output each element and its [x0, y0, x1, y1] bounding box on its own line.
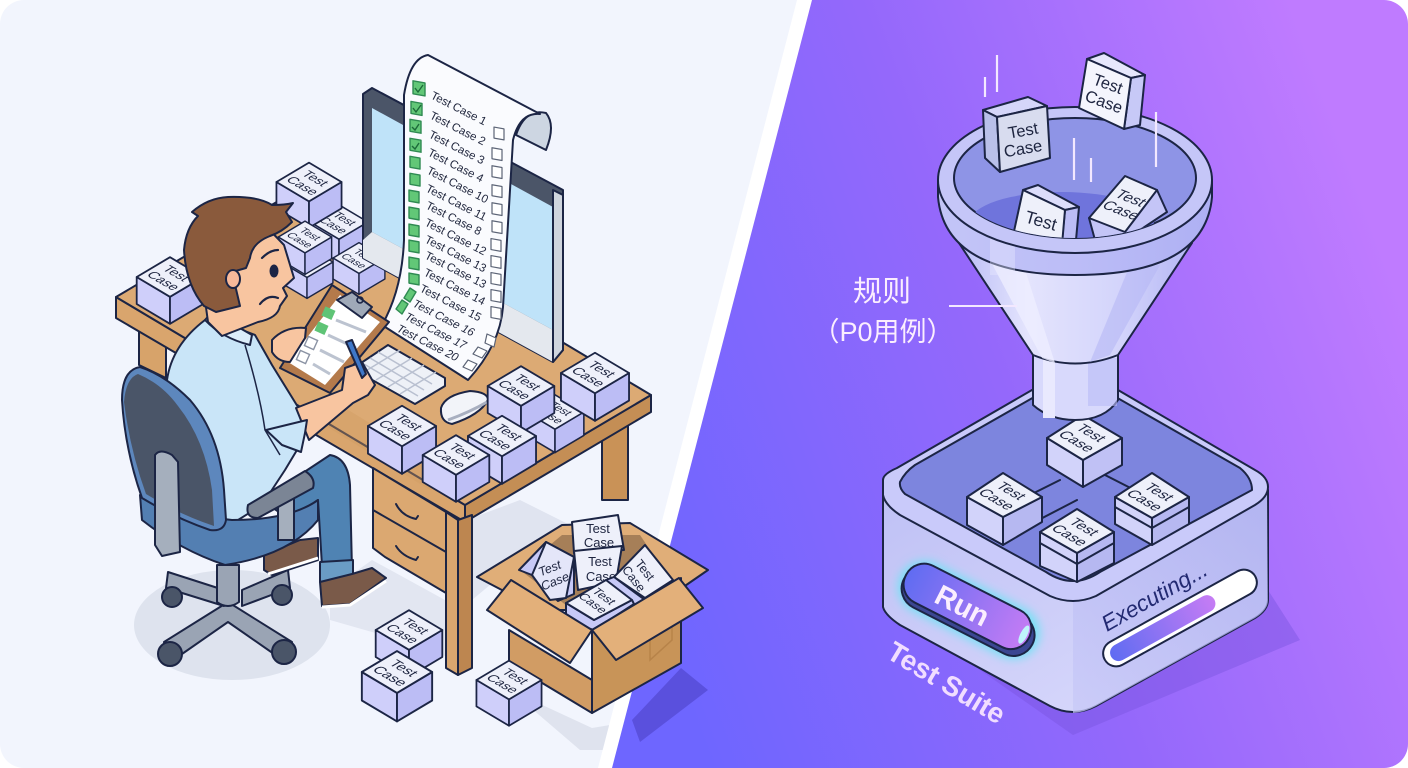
floor cubes: Case [382, 622, 423, 645]
floor cube right: Test [498, 667, 533, 686]
back desk cubes: Test [296, 226, 323, 242]
front desk cubes [368, 353, 629, 502]
checklist labels: Test Case 15 [418, 283, 483, 324]
checklist labels: Test Case 17 [403, 311, 469, 353]
stacked cubes in box: Test [586, 521, 610, 536]
monitor [363, 88, 563, 362]
panel: automated test suite: Test [1064, 516, 1104, 539]
funnel rim [938, 107, 1212, 275]
front desk cubes: Case [531, 405, 567, 426]
stacked cubes in box: Case [584, 535, 614, 550]
panel: automated test suite: Test [1139, 481, 1179, 504]
stacked cubes in box: Case [619, 563, 648, 595]
desk [116, 187, 651, 675]
chair [122, 367, 318, 565]
panel: automated test suite: Case [974, 486, 1019, 513]
stacked cubes in box: Case [539, 569, 571, 593]
back desk cubes [137, 163, 385, 324]
checklist labels: Test Case 2 [428, 110, 487, 148]
front desk cubes: Test [445, 441, 480, 461]
rule label: （P0用例） [812, 317, 954, 347]
front desk cubes: Test [545, 400, 576, 418]
checklist labels [395, 90, 490, 365]
front desk cubes: Case [375, 418, 417, 442]
back desk cubes: Case [338, 252, 369, 270]
back desk cubes: Test [298, 169, 333, 188]
checklist labels: Test Case 20 [395, 323, 461, 365]
falling cube right [1079, 53, 1145, 129]
tray cubes [1035, 474, 1130, 519]
front leg and shoe [262, 455, 386, 607]
checklist labels: Test Case 1 [429, 90, 488, 128]
empty boxes [463, 127, 504, 371]
check items [296, 306, 366, 374]
back desk cubes: Test [350, 248, 377, 263]
funnel spout [1033, 350, 1118, 420]
funnel cone [957, 240, 1192, 364]
back desk cubes: Case [283, 174, 322, 197]
checklist labels: Test Case 8 [424, 200, 483, 238]
checklist labels: Test Case 13 [423, 250, 488, 291]
drawers [373, 468, 446, 593]
checked boxes [396, 81, 425, 314]
stacked cubes in box: Test [632, 557, 658, 584]
front desk cubes: Case [494, 378, 535, 401]
floor cube right [476, 661, 542, 726]
falling cube right: Case [1083, 87, 1125, 117]
back shoe [264, 538, 318, 575]
keyboard [358, 345, 445, 404]
front desk cubes: Test [510, 372, 545, 392]
checklist labels: Test Case 16 [411, 298, 477, 340]
rule label: 规则 [853, 275, 911, 308]
panel: automated test suite [812, 53, 1300, 735]
checklist labels: Test Case 14 [422, 267, 487, 308]
run button [889, 552, 1049, 668]
checklist labels: Test Case 11 [424, 183, 488, 224]
stacked cubes in box: Case [575, 591, 611, 615]
stacked cubes in box [519, 515, 673, 630]
falling cube left [983, 97, 1050, 172]
panel: manual testing scene [116, 55, 708, 750]
checklist labels: Test Case 13 [423, 234, 488, 275]
pen [346, 340, 366, 378]
cubes inside funnel: Case [1016, 228, 1061, 258]
floor cubes: Case [368, 664, 411, 689]
cubes inside funnel: Test [1023, 207, 1059, 235]
back desk cubes: Test [159, 263, 194, 283]
checklist labels: Test Case 4 [426, 147, 486, 186]
back desk cubes: Case [283, 231, 315, 250]
cubes inside funnel [1011, 176, 1167, 258]
test suite label: Test Suite [882, 636, 1011, 730]
falling cube left: Test [1007, 120, 1040, 143]
front desk cubes: Test [391, 412, 427, 432]
floor cubes: Test [398, 616, 433, 636]
motion lines [985, 55, 1156, 182]
head [184, 197, 294, 336]
front desk cubes: Case [429, 447, 470, 470]
arm and hand [266, 340, 375, 452]
shirt [166, 317, 300, 519]
checklist labels: Test Case 3 [427, 129, 486, 167]
floor cubes: Test [385, 658, 421, 679]
panel: automated test suite: Case [1122, 487, 1167, 514]
checklist labels: Test Case 10 [425, 165, 490, 206]
cubes inside funnel: Case [1099, 198, 1143, 224]
cubes inside funnel: Test [1112, 187, 1149, 210]
back desk cubes: Test [329, 210, 360, 228]
floor cubes [362, 610, 442, 721]
left panel background [0, 0, 797, 768]
rule label [812, 275, 954, 347]
stacked cubes in box: Case [586, 569, 616, 584]
stacked cubes in box: Test [589, 586, 620, 607]
panel: automated test suite: Test [1071, 422, 1111, 445]
paper scroll checklist [382, 55, 551, 380]
checklist labels: Test Case 12 [423, 217, 488, 258]
floor shadows [134, 500, 640, 750]
front desk cubes: Case [568, 365, 610, 389]
front desk cubes: Case [475, 428, 517, 452]
executing label: Executing... [1097, 557, 1212, 636]
progress bar [1102, 568, 1258, 668]
back desk cubes: Case [143, 269, 184, 292]
leader line [949, 305, 1017, 307]
front desk cubes: Test [491, 422, 527, 442]
panel: automated test suite: Case [1047, 522, 1092, 549]
test suite box [883, 388, 1268, 713]
floor cube right: Case [483, 672, 522, 695]
front desk leg [446, 512, 472, 675]
right panel gradient background [612, 0, 1408, 768]
stacked cubes in box: Test [536, 557, 564, 579]
mouse [441, 391, 488, 424]
chair base [158, 565, 296, 666]
front desk cubes: Test [584, 359, 620, 379]
clipboard [272, 285, 389, 393]
panel: automated test suite: Case [1054, 428, 1099, 455]
box shadow [979, 592, 1300, 735]
panel: automated test suite: Test [991, 480, 1031, 503]
back desk cubes: Case [315, 215, 351, 236]
box shadow on purple [632, 668, 708, 742]
left hand [272, 328, 306, 362]
falling cube right: Test [1090, 71, 1125, 98]
stacked cubes in box: Test [588, 554, 612, 569]
run label: Run [929, 579, 994, 633]
falling cube left: Case [1003, 137, 1044, 161]
cardboard box [477, 515, 708, 713]
